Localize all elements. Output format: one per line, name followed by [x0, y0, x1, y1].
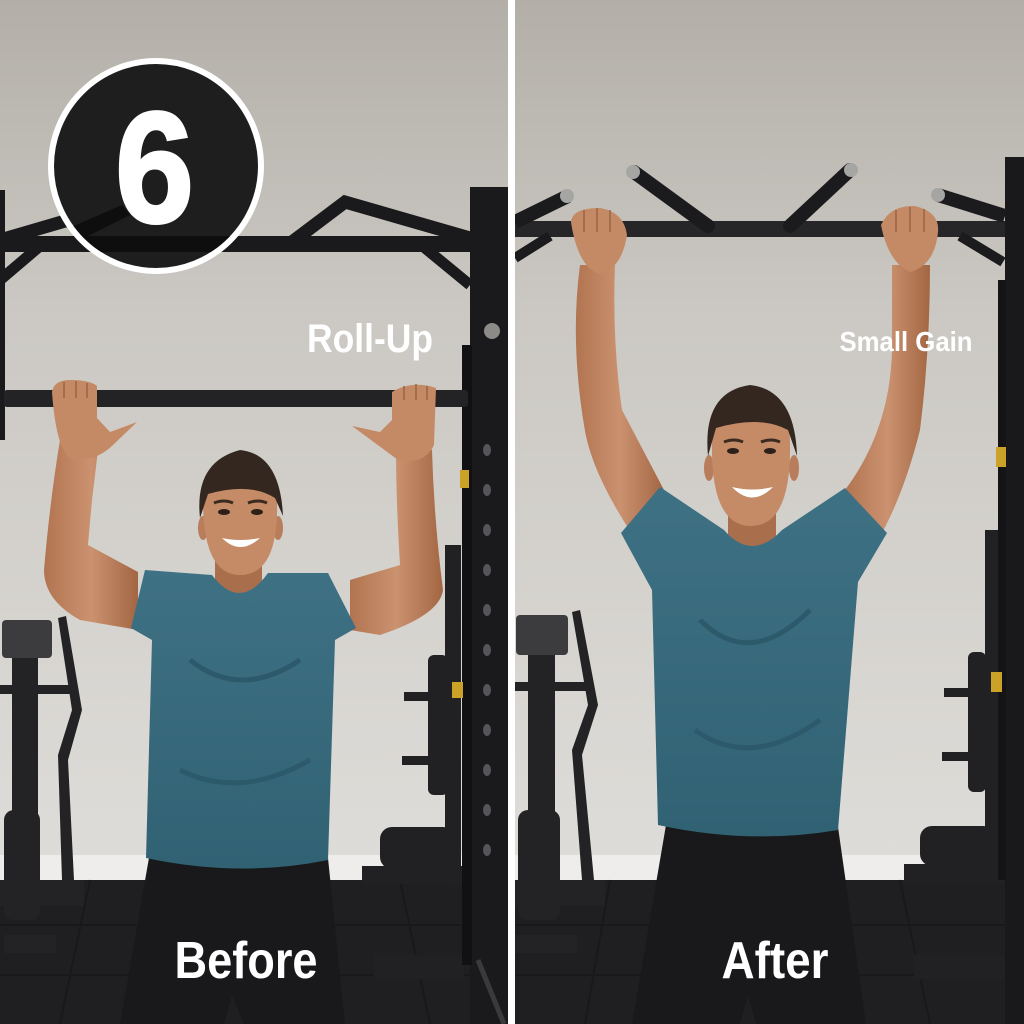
neck: [215, 561, 262, 593]
left hand: [52, 380, 137, 460]
shirt: [131, 570, 356, 869]
left arm: [44, 440, 138, 630]
number badge: [40, 61, 270, 271]
man before: [44, 380, 443, 880]
gym equipment right: [904, 530, 998, 979]
rack post: [991, 157, 1024, 880]
left hand: [571, 208, 627, 274]
right arm: [845, 265, 930, 533]
upper bar: [0, 202, 470, 285]
gym equipment left: [0, 616, 84, 906]
neck: [728, 514, 776, 546]
gym equipment right: [362, 545, 464, 979]
pull-up bar with handles: [515, 170, 1005, 262]
label: roll-up: Roll-Up: [307, 317, 433, 361]
shorts: [656, 826, 846, 880]
label: after: After: [722, 932, 828, 990]
right arm: [350, 450, 443, 635]
man after: [571, 206, 938, 880]
rack post: [452, 187, 508, 1024]
right hand: [881, 206, 938, 272]
left arm: [576, 265, 664, 534]
divider: [508, 0, 515, 1024]
lower bar: [4, 390, 468, 407]
shorts: [145, 858, 330, 880]
right hand: [352, 384, 436, 461]
gym equipment left: [515, 610, 605, 906]
panel: after: [515, 0, 1024, 1024]
head: [198, 450, 283, 575]
head: [704, 385, 799, 526]
shirt: [621, 487, 887, 836]
number badge: 6: [115, 79, 194, 256]
label: before: Before: [174, 932, 318, 990]
label: small gain: Small Gain: [840, 326, 972, 357]
panel: before: [0, 0, 508, 1024]
